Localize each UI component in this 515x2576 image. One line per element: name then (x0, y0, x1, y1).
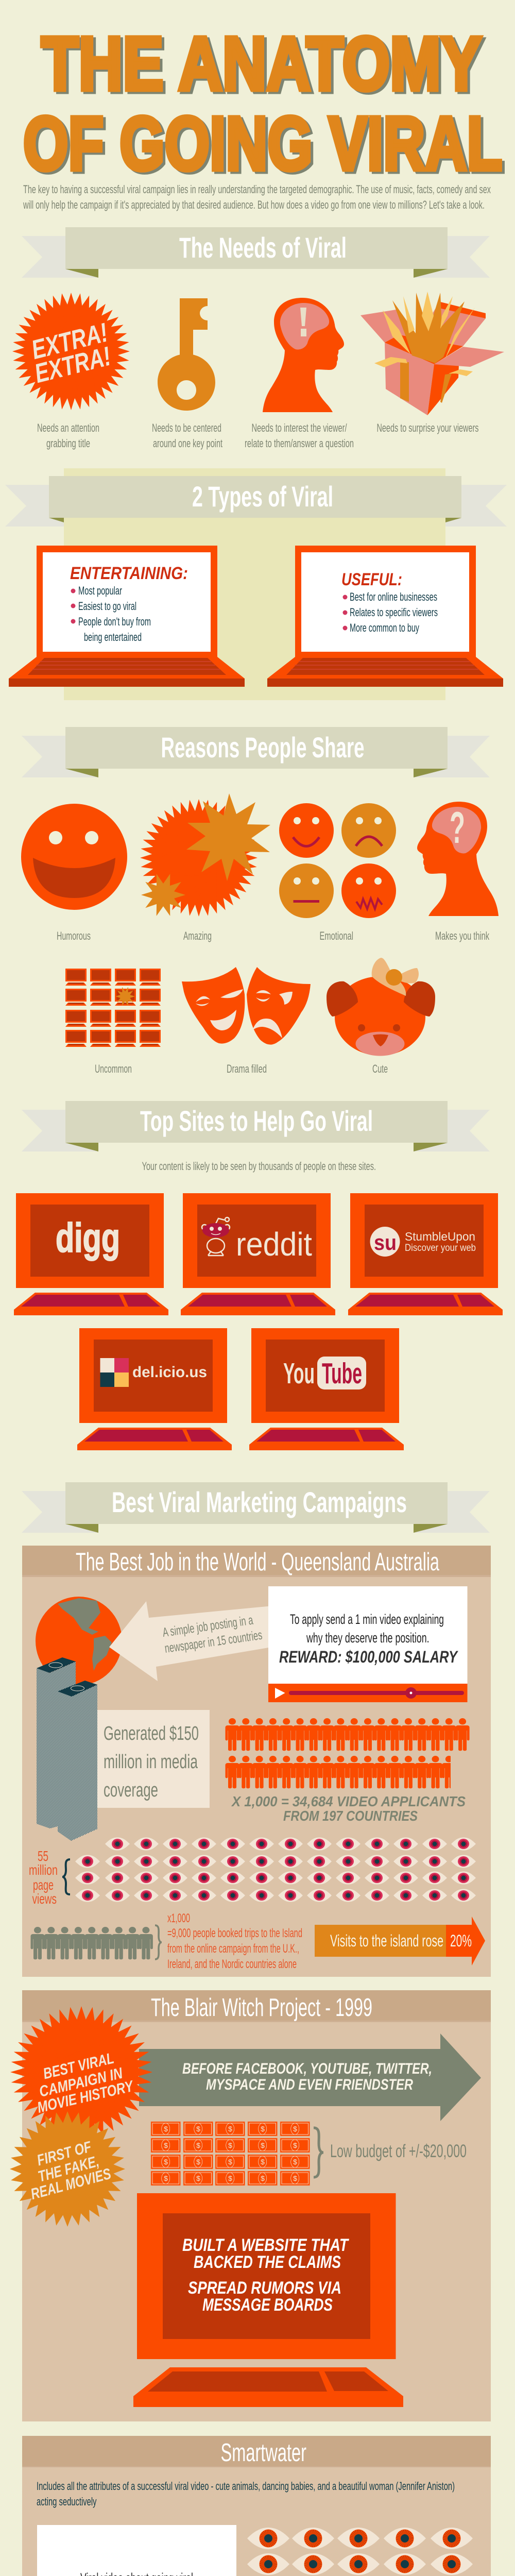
icon: uncommon laptop grid (65, 969, 161, 1047)
pictogram: youtube view eyes (247, 2528, 473, 2576)
banner: reasons people share: Reasons People Share (161, 731, 365, 764)
icon: cute dog (327, 958, 435, 1056)
banner: best viral marketing campaigns (22, 1482, 490, 1533)
stat: people booked trips: from the online campaign from the U.K., (167, 1942, 299, 1956)
arrow: visits rose 20%: 20% (450, 1931, 472, 1950)
monitor: website and rumors: SPREAD RUMORS VIA (188, 2278, 341, 2298)
laptop: entertaining: People don't buy from (78, 615, 151, 628)
monitor: delicious: del.icio.us (132, 1364, 207, 1381)
badge: first of the fake: FIRST OF (35, 2138, 94, 2169)
icon: extra extra starburst: EXTRA! (28, 317, 111, 365)
icon: humorous smiley (21, 804, 127, 910)
panel: smartwater (22, 2436, 491, 2576)
banner: top sites: Top Sites to Help Go Viral (140, 1105, 373, 1137)
badge: best viral campaign: BEST VIRAL (42, 2050, 115, 2082)
monitor: website and rumors: BACKED THE CLAIMS (194, 2252, 341, 2272)
laptop: useful: Relates to specific viewers (350, 606, 438, 619)
laptop: entertaining: Easiest to go viral (78, 600, 136, 613)
video player: how to apply: REWARD: $100,000 SALARY (279, 1648, 458, 1666)
stat: 55 million page views (29, 1848, 70, 1907)
icon: head with exclamation (263, 298, 344, 412)
pictogram: money bills: $$$$$ (164, 2174, 297, 2182)
icon: extra extra starburst: EXTRA! (31, 341, 114, 389)
video player: how to apply: why they deserve the position. (306, 1630, 430, 1646)
monitor: website and rumors: BUILT A WEBSITE THAT (182, 2235, 350, 2255)
stat: video applicants (231, 1793, 466, 1824)
icon: money stacks (37, 1657, 97, 1841)
badge: first of the fake: THE FAKE, (36, 2153, 101, 2185)
captions: reasons row 1: Amazing (183, 929, 212, 942)
panel: the best job in the world (22, 1546, 491, 1977)
captions: reasons row 2: Cute (372, 1062, 388, 1075)
monitor: youtube (249, 1328, 404, 1450)
subheading: top sites: Your content is likely to be seen by thousands of people on these sites. (142, 1160, 376, 1173)
stat: people booked trips (167, 1911, 302, 1971)
badge: first of the fake: REAL MOVIES (29, 2165, 113, 2203)
captions: reasons row 1: Makes you think (435, 929, 490, 942)
banner: 2 types of viral: 2 Types of Viral (192, 480, 333, 513)
stat: low budget (314, 2128, 467, 2177)
panel header: smartwater (22, 2436, 491, 2467)
laptop: entertaining: ENTERTAINING: (70, 564, 188, 583)
stat: 55 million page views: 55 (38, 1848, 48, 1864)
captions: reasons row 1: Humorous (57, 929, 91, 942)
arrow: job posting: A simple job posting in a (162, 1613, 254, 1640)
callout: media coverage: Generated $150 (104, 1723, 199, 1744)
captions: needs: relate to them/answer a question (245, 437, 354, 450)
icon: surprise gift box (360, 292, 504, 415)
arrow: visits rose 20% (315, 1917, 485, 1965)
monitor: youtube: You (283, 1357, 315, 1390)
pictogram: money bills: $$$$$ (164, 2141, 297, 2149)
text: smartwater description: acting seductively (37, 2495, 97, 2508)
captions: needs: Needs to interest the viewer/ (251, 421, 347, 434)
badge: first of the fake (6, 2107, 129, 2231)
icon: amazing bursts (138, 793, 270, 919)
monitor: stumbleupon: su (374, 1230, 397, 1255)
captions: needs: Needs to be centered (152, 421, 221, 434)
stat: video applicants: X 1,000 = 34,684 VIDEO APPLICANTS (231, 1793, 466, 1809)
icon: key (158, 298, 215, 411)
captions: needs: grabbing title (46, 437, 90, 450)
callout: media coverage: million in media (104, 1751, 198, 1773)
monitor: youtube: Tube (322, 1357, 362, 1390)
callout: media coverage: coverage (104, 1780, 158, 1801)
monitor: website and rumors: MESSAGE BOARDS (202, 2295, 333, 2315)
icon: head with question mark: ? (450, 803, 465, 853)
banner: top sites (22, 1101, 490, 1151)
captions: needs: around one key point (153, 437, 222, 450)
stat: 55 million page views: views (32, 1891, 57, 1907)
stat: video applicants: FROM 197 COUNTRIES (283, 1808, 418, 1824)
banner: the needs of viral (22, 227, 490, 278)
laptop: useful (267, 546, 503, 687)
pictogram: money bills: $$$$$ (164, 2125, 297, 2133)
stat: 55 million page views: page (33, 1877, 54, 1893)
video player: how to apply (268, 1586, 468, 1702)
badge: best viral campaign: CAMPAIGN IN (38, 2064, 125, 2100)
title (23, 22, 502, 186)
stat: people booked trips: =9,000 people booked trips to the Island (167, 1926, 302, 1940)
arrow: before facebook (139, 2033, 481, 2121)
captions: reasons row 2: Uncommon (95, 1062, 132, 1075)
captions: reasons row 1: Emotional (319, 929, 353, 942)
laptop: entertaining: Most popular (78, 584, 122, 597)
pictogram: video applicants (226, 1718, 470, 1788)
text: smartwater description (37, 2480, 455, 2508)
monitor: reddit (181, 1193, 335, 1315)
monitor: website and rumors (133, 2193, 403, 2407)
laptop: useful: Best for online businesses (350, 590, 437, 603)
captions: needs: Needs an attention (37, 421, 99, 434)
arrow: before facebook: MYSPACE AND EVEN FRIENDSTER (206, 2076, 413, 2093)
banner: 2 types of viral (5, 476, 507, 527)
pictogram: page view eyes (75, 1837, 476, 1902)
panel header: blair witch: The Blair Witch Project - 1999 (151, 1994, 372, 2022)
arrow: job posting: newspaper in 15 countries (164, 1628, 263, 1656)
monitor: digg: digg (56, 1215, 120, 1261)
badge: best viral campaign: MOVIE HISTORY (36, 2077, 136, 2116)
icon: drama masks (182, 967, 311, 1045)
callout: media coverage (97, 1710, 210, 1808)
captions: reasons row 2: Drama filled (227, 1062, 267, 1075)
panel: the blair witch project (6, 1990, 491, 2421)
pictogram: people booked trips (31, 1925, 162, 1959)
panel header: blair witch (22, 1990, 491, 2022)
laptop: useful: USEFUL: (341, 570, 402, 589)
monitor: delicious (77, 1328, 232, 1450)
laptop: useful: More common to buy (350, 621, 419, 634)
monitor: digg (14, 1193, 168, 1315)
badge: best viral campaign (7, 2003, 156, 2141)
panel header: smartwater: Smartwater (220, 2439, 306, 2467)
captions: reasons row 2 (95, 1062, 388, 1075)
laptop: entertaining (9, 546, 245, 687)
stat: people booked trips: x1,000 (167, 1911, 190, 1925)
icon: head with question mark (417, 802, 499, 916)
monitor: stumbleupon: StumbleUpon (405, 1230, 475, 1243)
monitor: stumbleupon: Discover your web (405, 1243, 476, 1253)
video player: viral video (37, 2525, 236, 2576)
banner: the needs of viral: The Needs of Viral (179, 231, 347, 264)
icon: extra extra starburst (10, 290, 132, 413)
monitor: reddit: reddit (236, 1226, 312, 1263)
icon: emotional faces (279, 803, 396, 918)
laptop: entertaining: being entertained (84, 631, 142, 643)
icon: globe (36, 1597, 122, 1685)
pictogram: money bills (151, 2122, 310, 2185)
stat: 55 million page views: million (29, 1862, 58, 1878)
arrow: visits rose 20%: Visits to the island rose (330, 1931, 443, 1950)
monitor: stumbleupon (348, 1193, 503, 1315)
stat: people booked trips: Ireland, and the Nordic countries alone (167, 1957, 297, 1971)
arrow: before facebook: BEFORE FACEBOOK, YOUTUBE, TWITTER, (182, 2060, 432, 2077)
captions: reasons row 1 (57, 929, 490, 942)
arrow: job posting (109, 1601, 278, 1681)
banner: reasons people share (22, 727, 490, 777)
intro text (23, 183, 491, 211)
pictogram: money bills: $$$$$ (164, 2158, 297, 2166)
captions: needs (37, 421, 479, 450)
panel: 2 types backdrop (64, 468, 445, 700)
